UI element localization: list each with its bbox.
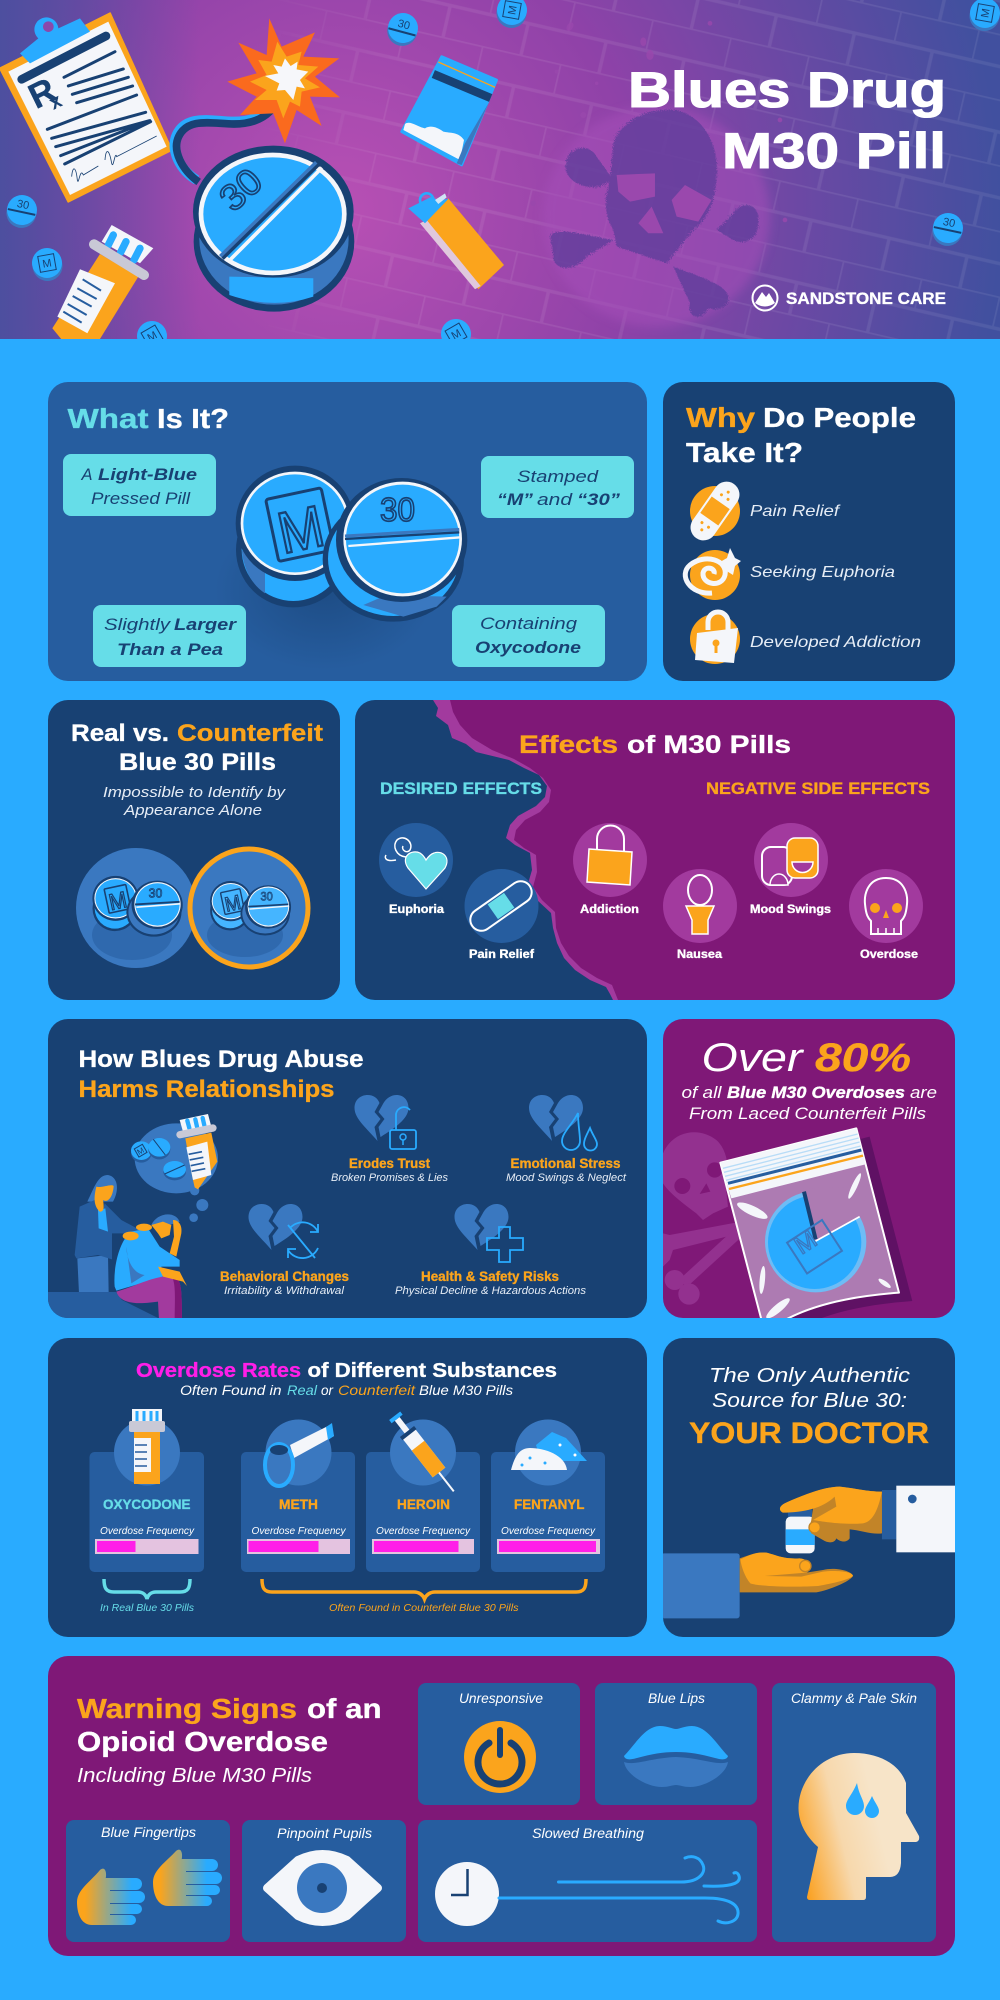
logo: Sandstone Care bbox=[752, 286, 946, 310]
small floating pills: M bbox=[506, 5, 520, 16]
heading: Real vs Counterfeit: Counterfeit bbox=[177, 720, 323, 747]
effect: overdose bbox=[849, 869, 923, 961]
heading: warning signs bbox=[77, 1693, 382, 1787]
heading: What Is It: Is It? bbox=[157, 403, 229, 434]
brace: in counterfeit pills: Often Found in Counterfeit Blue 30 Pills bbox=[329, 1602, 519, 1614]
icon: prescription clipboard: R bbox=[22, 70, 62, 117]
heading: harms relationships bbox=[78, 1046, 364, 1103]
effect: pain relief: Pain Relief bbox=[469, 949, 534, 961]
icon: counterfeit pills: M bbox=[223, 892, 243, 917]
card: oxycodone: Overdose Frequency bbox=[100, 1525, 195, 1537]
effect: nausea: Nausea bbox=[677, 949, 723, 961]
small floating pills: M bbox=[146, 329, 159, 344]
text block: only authentic source bbox=[689, 1367, 929, 1444]
panel: Warning Signs bbox=[48, 1656, 955, 1956]
card: meth bbox=[241, 1420, 355, 1572]
callout: light-blue pill: Light-Blue bbox=[98, 465, 197, 484]
illustration: thought bubble with bottle bbox=[131, 1114, 218, 1222]
card: unresponsive bbox=[418, 1683, 580, 1805]
panel: Real vs Counterfeit bbox=[48, 700, 340, 1000]
heading: Why: Take It? bbox=[686, 437, 803, 468]
panel: Why Do People Take It bbox=[663, 382, 955, 681]
card: pinpoint pupils: Pinpoint Pupils bbox=[277, 1826, 372, 1841]
card: unresponsive: Unresponsive bbox=[459, 1691, 543, 1706]
callout: light-blue pill bbox=[63, 454, 216, 516]
icon: real pills: M bbox=[106, 886, 129, 915]
icon: giant 30 pill: 30 bbox=[211, 160, 270, 219]
icon: bag of powder bbox=[402, 57, 497, 165]
text block: laced counterfeit: of all bbox=[682, 1084, 723, 1102]
heading: warning signs: of an bbox=[307, 1693, 382, 1724]
icon: real pills: 30 bbox=[149, 885, 162, 900]
illustration: standing person bbox=[75, 1175, 143, 1293]
callout: containing oxycodone: Oxycodone bbox=[475, 638, 581, 657]
item: health and safety risks: Physical Decline & Hazardous Actions bbox=[395, 1285, 587, 1297]
icon: M and 30 pills bbox=[236, 466, 467, 622]
card: blue fingertips bbox=[66, 1820, 230, 1942]
effect: nausea bbox=[663, 869, 737, 961]
stat: over 80 percent bbox=[704, 1043, 910, 1072]
icon and label: developed addiction bbox=[690, 612, 921, 664]
item: emotional stress bbox=[506, 1095, 627, 1184]
panel: Over 80 percent bbox=[663, 1019, 955, 1328]
item: health and safety risks bbox=[395, 1204, 587, 1297]
effect: addiction: Addiction bbox=[580, 904, 639, 916]
text block: only authentic source: Source for Blue 30: bbox=[712, 1390, 907, 1412]
icon and label: pain relief: Pain Relief bbox=[750, 503, 841, 520]
heading: harms relationships: How Blues Drug Abuse bbox=[78, 1046, 364, 1073]
text block: only authentic source: YOUR DOCTOR bbox=[689, 1417, 929, 1450]
icon: giant 30 pill bbox=[193, 146, 354, 312]
icon: zip bag with pill bbox=[720, 1128, 912, 1328]
heading: warning signs: Warning Signs bbox=[77, 1693, 297, 1724]
subheading bbox=[103, 785, 286, 819]
callout: containing oxycodone bbox=[452, 605, 605, 667]
text block: laced counterfeit: are bbox=[910, 1084, 937, 1102]
item: behavioral changes: Behavioral Changes bbox=[220, 1269, 349, 1284]
callout: stamped: “30” bbox=[577, 490, 621, 509]
logo: Sandstone Care: SANDSTONE CARE bbox=[786, 289, 946, 308]
callout: larger than a pea: Than a Pea bbox=[117, 640, 223, 659]
card: heroin: HEROIN bbox=[397, 1496, 450, 1512]
item: health and safety risks: Health & Safety Risks bbox=[421, 1269, 559, 1284]
callout: light-blue pill: A bbox=[81, 465, 92, 484]
card: meth: Overdose Frequency bbox=[252, 1525, 346, 1537]
stat: over 80 percent: Over bbox=[702, 1036, 804, 1080]
effect: addiction bbox=[573, 823, 647, 916]
title bbox=[631, 70, 943, 169]
callout: larger than a pea bbox=[93, 605, 246, 667]
heading: Why bbox=[686, 402, 916, 468]
icon: lighter bbox=[408, 193, 504, 289]
card: clammy and pale skin bbox=[772, 1683, 936, 1942]
icon and label: seeking euphoria: Seeking Euphoria bbox=[750, 564, 895, 581]
subheading: Real bbox=[287, 1382, 318, 1398]
item: behavioral changes bbox=[220, 1204, 349, 1297]
small floating pills: 30 bbox=[396, 18, 411, 32]
heading: Real vs Counterfeit: Blue 30 Pills bbox=[119, 749, 276, 776]
subheading: negative side effects: NEGATIVE SIDE EFFECTS bbox=[706, 780, 930, 798]
illustration: seated person bbox=[48, 1214, 187, 1320]
item: erodes trust: Broken Promises & Lies bbox=[331, 1172, 448, 1184]
callout: light-blue pill: Pressed Pill bbox=[91, 489, 191, 508]
card: oxycodone: OXYCODONE bbox=[103, 1496, 190, 1512]
card: meth: METH bbox=[279, 1496, 318, 1512]
heading: overdose rates: of Different Substances bbox=[308, 1360, 557, 1382]
effect: euphoria bbox=[379, 823, 453, 916]
heading: Effects: of M30 Pills bbox=[627, 731, 791, 759]
icon: background skull and bones bbox=[663, 1132, 740, 1304]
subheading: Counterfeit bbox=[338, 1382, 416, 1398]
icon: real pills bbox=[76, 848, 196, 968]
callout: larger than a pea: Larger bbox=[174, 615, 238, 634]
item: emotional stress: Emotional Stress bbox=[510, 1156, 620, 1171]
icon and label: developed addiction: Developed Addiction bbox=[750, 634, 921, 651]
heading: warning signs: Opioid Overdose bbox=[77, 1726, 328, 1757]
subheading: or bbox=[321, 1382, 334, 1398]
card: fentanyl: FENTANYL bbox=[514, 1496, 585, 1512]
heading: Why: Why bbox=[686, 402, 755, 433]
item: behavioral changes: Irritability & Withdrawal bbox=[224, 1285, 345, 1297]
title: Blues Drug bbox=[628, 62, 946, 118]
heading: Effects: Effects bbox=[519, 731, 618, 759]
panel: Your Doctor bbox=[661, 1338, 956, 1637]
icon: spray-painted skull and crossbones bbox=[531, 21, 787, 327]
panel: What Is It bbox=[48, 382, 647, 681]
card: fentanyl bbox=[491, 1420, 605, 1572]
subheading: Often Found in bbox=[180, 1382, 282, 1398]
text block: only authentic source: The Only Authentic bbox=[709, 1365, 910, 1387]
heading: overdose rates bbox=[136, 1360, 557, 1382]
icon: counterfeit pills: 30 bbox=[260, 890, 273, 903]
brace: in counterfeit pills bbox=[262, 1579, 586, 1614]
icon: counterfeit pills bbox=[190, 849, 308, 967]
text block: laced counterfeit: Blue M30 Overdoses bbox=[727, 1084, 905, 1102]
card: blue fingertips: Blue Fingertips bbox=[101, 1825, 196, 1840]
small floating pills: 30 bbox=[942, 216, 956, 230]
subheading: Appearance Alone bbox=[123, 803, 262, 819]
torn paper divider bbox=[433, 700, 955, 1000]
heading: Real vs Counterfeit bbox=[71, 720, 323, 776]
card: slowed breathing bbox=[418, 1820, 757, 1942]
illustration: thought bubble with bottle: M bbox=[135, 1146, 146, 1157]
illustration: doctor hand with bottle bbox=[780, 1486, 956, 1553]
heading: harms relationships: Harms Relationships bbox=[78, 1076, 334, 1103]
item: emotional stress: Mood Swings & Neglect bbox=[506, 1172, 627, 1184]
card: slowed breathing: Slowed Breathing bbox=[532, 1826, 645, 1841]
small floating pills bbox=[4, 0, 1000, 356]
small floating pills: M bbox=[979, 8, 993, 19]
panel: Overdose Rates bbox=[48, 1338, 647, 1637]
illustration: bench bbox=[48, 1292, 158, 1318]
text block: laced counterfeit bbox=[682, 1086, 936, 1119]
title: M30 Pill bbox=[722, 123, 946, 179]
card: blue lips bbox=[595, 1683, 757, 1805]
heading: warning signs: Including Blue M30 Pills bbox=[77, 1765, 312, 1787]
card: fentanyl: Overdose Frequency bbox=[501, 1525, 596, 1537]
effect: euphoria: Euphoria bbox=[389, 904, 445, 916]
card: blue lips: Blue Lips bbox=[648, 1691, 705, 1706]
subheading: Blue M30 Pills bbox=[419, 1382, 513, 1398]
callout: stamped bbox=[481, 456, 634, 518]
icon and label: pain relief bbox=[685, 477, 841, 545]
subheading bbox=[180, 1382, 513, 1398]
icon: prescription clipboard: x bbox=[46, 90, 66, 114]
heading: Real vs Counterfeit: Real vs. bbox=[71, 720, 169, 747]
card: heroin bbox=[366, 1410, 480, 1572]
heading: Why: Do People bbox=[763, 402, 916, 433]
small floating pills: 30 bbox=[16, 198, 30, 212]
effect: pain relief bbox=[464, 869, 538, 961]
heading: overdose rates: Overdose Rates bbox=[136, 1360, 301, 1382]
header banner bbox=[0, 0, 1000, 339]
callout: larger than a pea: Slightly bbox=[104, 615, 172, 634]
subheading: desired effects: DESIRED EFFECTS bbox=[380, 780, 542, 798]
heading: What Is It bbox=[68, 403, 229, 434]
heading: Effects bbox=[520, 734, 790, 754]
effect: mood swings bbox=[750, 823, 831, 916]
brace: in real pills: In Real Blue 30 Pills bbox=[100, 1602, 195, 1614]
icon and label: seeking euphoria bbox=[685, 548, 895, 600]
pill shadow bbox=[215, 510, 435, 670]
card: pinpoint pupils bbox=[242, 1820, 406, 1942]
brace: in real pills bbox=[100, 1579, 195, 1614]
small floating pills: M bbox=[42, 257, 53, 271]
stat: over 80 percent: 80% bbox=[815, 1036, 911, 1080]
panel: Effects of M30 Pills bbox=[355, 700, 955, 1000]
callout: containing oxycodone: Containing bbox=[480, 614, 578, 633]
icon: bomb fuse bbox=[169, 113, 274, 186]
callout: stamped: Stamped bbox=[517, 467, 599, 486]
panel: Harms Relationships bbox=[48, 1019, 647, 1320]
icon: prescription clipboard bbox=[0, 13, 172, 202]
small floating pills: M bbox=[450, 327, 463, 342]
icon: M and 30 pills: M bbox=[272, 494, 330, 567]
text block: laced counterfeit: From Laced Counterfeit Pills bbox=[689, 1105, 926, 1123]
item: erodes trust: Erodes Trust bbox=[349, 1156, 430, 1171]
icon: explosion bbox=[227, 18, 340, 143]
effect: mood swings: Mood Swings bbox=[750, 904, 831, 916]
heading: What Is It: What bbox=[68, 403, 148, 434]
icon: zip bag with pill: M bbox=[789, 1225, 822, 1260]
subheading: Impossible to Identify by bbox=[103, 785, 286, 801]
card: clammy and pale skin: Clammy & Pale Skin bbox=[791, 1691, 917, 1706]
icon: pill bottle bbox=[52, 225, 153, 342]
illustration: patient hand bbox=[661, 1552, 853, 1618]
callout: stamped: “M” bbox=[497, 490, 534, 509]
item: erodes trust bbox=[331, 1095, 448, 1184]
icon: M and 30 pills: 30 bbox=[380, 492, 415, 529]
callout: stamped: and bbox=[537, 490, 573, 509]
card: heroin: Overdose Frequency bbox=[376, 1525, 471, 1537]
effect: overdose: Overdose bbox=[860, 949, 918, 961]
card: oxycodone bbox=[90, 1409, 204, 1572]
